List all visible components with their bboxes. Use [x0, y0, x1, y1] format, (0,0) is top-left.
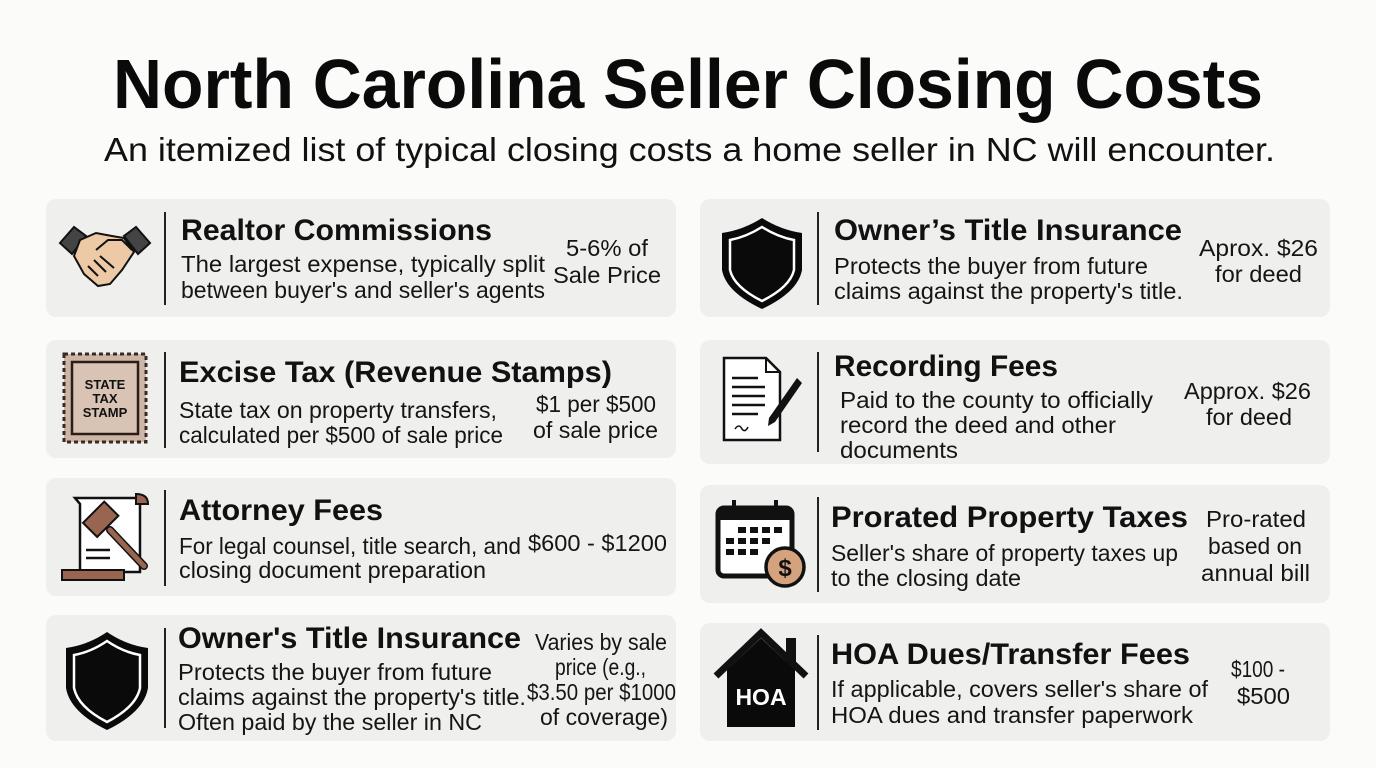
- description: The largest expense, typically split: [181, 251, 546, 277]
- panel: owner's title insurance (right): [700, 199, 1330, 317]
- price: Varies by sale: [535, 629, 667, 655]
- description: Often paid by the seller in NC: [178, 709, 482, 735]
- panel: excise tax: [46, 340, 676, 458]
- price: [533, 391, 658, 443]
- description: [179, 397, 503, 448]
- panel: HOA dues: [700, 623, 1330, 741]
- icon: tax stamp: [64, 354, 146, 442]
- icon: shield: [66, 632, 148, 730]
- description: [179, 533, 521, 583]
- description: State tax on property transfers,: [179, 397, 497, 423]
- heading: Recording Fees: [834, 350, 1058, 383]
- description: claims against the property's title.: [834, 278, 1183, 304]
- description: [831, 676, 1209, 728]
- icon: HOA house: HOA: [735, 684, 787, 710]
- price: Pro-rated: [1206, 506, 1306, 532]
- description: between buyer's and seller's agents: [181, 277, 545, 303]
- title: North Carolina Seller Closing Costs: [113, 45, 1263, 123]
- icon: HOA house: [716, 633, 806, 727]
- description: Protects the buyer from future: [834, 253, 1148, 279]
- price: of sale price: [533, 417, 658, 443]
- description: [831, 540, 1178, 591]
- description: to the closing date: [831, 565, 1021, 591]
- price: 5-6% of: [566, 235, 649, 261]
- panel: recording fees: [700, 340, 1330, 464]
- heading: Excise Tax (Revenue Stamps): [179, 356, 612, 389]
- price: annual bill: [1201, 560, 1310, 586]
- panel: owner's title insurance (left): [46, 615, 676, 741]
- price: [1201, 506, 1310, 586]
- description: record the deed and other: [840, 412, 1116, 438]
- icon: tax stamp: STATE: [85, 377, 126, 392]
- heading: HOA Dues/Transfer Fees: [831, 638, 1190, 671]
- heading: Owner's Title Insurance: [178, 622, 521, 655]
- heading: Prorated Property Taxes: [831, 501, 1188, 534]
- icon: handshake: [60, 227, 150, 286]
- price: [1199, 235, 1318, 287]
- description: closing document preparation: [179, 557, 486, 583]
- description: calculated per $500 of sale price: [179, 422, 503, 448]
- panel: realtor commissions: [46, 199, 676, 317]
- price: $3.50 per $1000: [527, 679, 676, 705]
- icon: shield: [722, 218, 802, 309]
- description: [840, 387, 1154, 463]
- heading: Attorney Fees: [179, 494, 383, 527]
- icon: tax stamp: TAX: [92, 391, 118, 406]
- description: HOA dues and transfer paperwork: [831, 702, 1194, 728]
- description: documents: [840, 437, 958, 463]
- description: Protects the buyer from future: [178, 659, 492, 685]
- icon: calendar with coin: $: [778, 555, 792, 582]
- description: Paid to the county to officially: [840, 387, 1154, 413]
- price: of coverage): [540, 704, 668, 730]
- description: [178, 659, 526, 735]
- icon: document with pen: [724, 358, 802, 440]
- price: based on: [1208, 533, 1302, 559]
- panel: attorney fees: [46, 478, 676, 596]
- price: Aprox. $26: [1199, 235, 1318, 261]
- icon: tax stamp: STAMP: [83, 405, 128, 420]
- price: Sale Price: [553, 262, 661, 288]
- price: $1 per $500: [536, 391, 656, 417]
- heading: Realtor Commissions: [181, 214, 492, 247]
- price: [553, 235, 661, 288]
- description: If applicable, covers seller's share of: [831, 676, 1209, 702]
- description: claims against the property's title.: [178, 684, 526, 710]
- description: [181, 251, 546, 303]
- description: Seller's share of property taxes up: [831, 540, 1178, 566]
- price: for deed: [1206, 404, 1292, 430]
- price: [527, 629, 676, 730]
- subtitle: An itemized list of typical closing costs a home seller in NC will encounter.: [104, 131, 1275, 168]
- heading: Owner’s Title Insurance: [834, 214, 1182, 247]
- icon: gavel and scroll: [62, 494, 148, 580]
- description: For legal counsel, title search, and: [179, 533, 521, 559]
- price: [1231, 656, 1290, 709]
- price: $100 -: [1231, 656, 1285, 682]
- price: price (e.g.,: [555, 654, 646, 680]
- panel: prorated property taxes: [700, 485, 1330, 603]
- icon: calendar with coin: [718, 500, 804, 586]
- description: [834, 253, 1183, 304]
- price: Approx. $26: [1184, 378, 1311, 404]
- price: for deed: [1215, 261, 1302, 287]
- price: $500: [1237, 683, 1290, 709]
- price: $600 - $1200: [528, 530, 667, 556]
- price: [1184, 378, 1311, 430]
